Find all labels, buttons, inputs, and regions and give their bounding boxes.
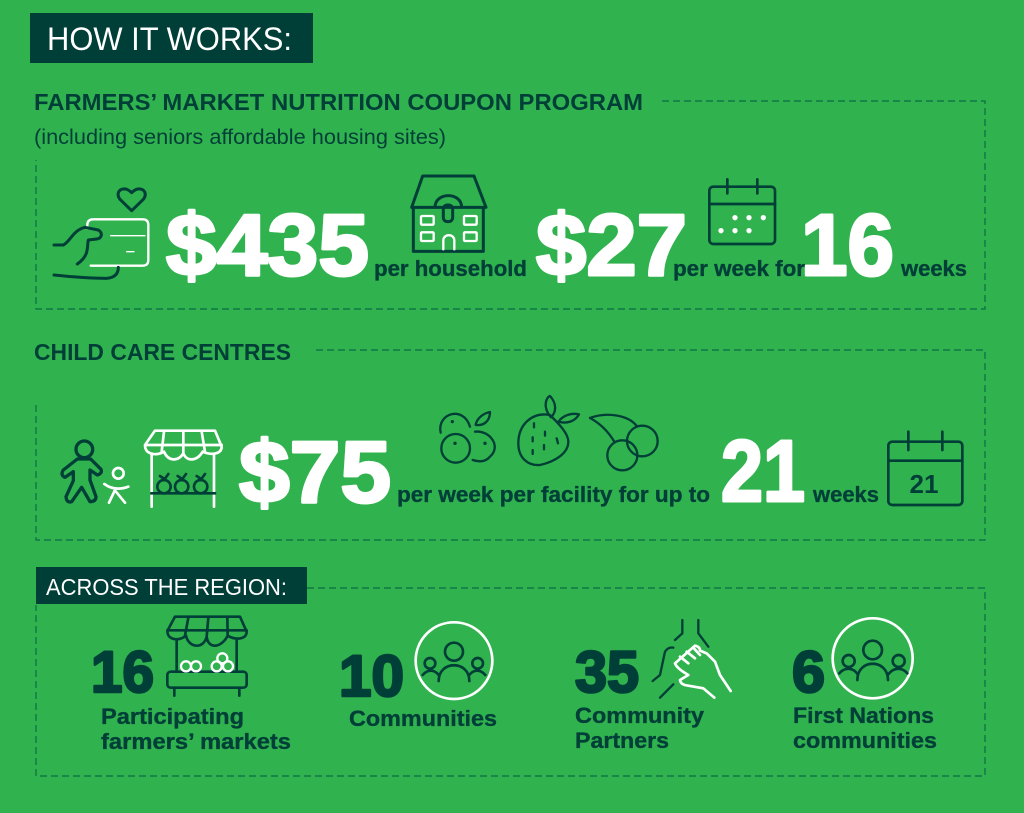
number: 21 weeks: 21 — [721, 423, 805, 520]
icon: house — [412, 176, 486, 251]
icon: joined hands — [653, 620, 731, 698]
label: per week per facility for up to: per week per facility for up to — [397, 482, 710, 507]
label: community partners: Partners — [575, 728, 669, 753]
icon: people in circle — [416, 622, 492, 699]
label: first nations communities: communities — [793, 728, 937, 753]
stat: 10 communities: 10 — [339, 644, 404, 709]
title: HOW IT WORKS: — [47, 21, 292, 57]
icon: calendar 21 — [888, 432, 962, 505]
label: weeks: weeks — [812, 482, 879, 507]
panel: farmers' market nutrition coupon program — [34, 89, 985, 309]
heading: coupon program: FARMERS’ MARKET NUTRITION COUPON PROGRAM — [34, 89, 643, 115]
icon: hand holding card with heart — [54, 189, 148, 278]
label: per household: per household — [374, 256, 527, 281]
amount: $75: $75 — [239, 424, 391, 521]
panel: child care centres — [34, 339, 985, 540]
label: community partners — [575, 703, 705, 753]
stat: 6 first nations communities — [792, 618, 937, 753]
icon: market stall with apples — [145, 431, 222, 507]
label: per week for: per week for — [673, 256, 805, 281]
number: 16 weeks: 16 — [801, 197, 894, 294]
icon: calendar with dots — [709, 179, 775, 244]
title — [30, 13, 313, 63]
icon: cherries — [590, 415, 658, 470]
label: community partners: Community — [575, 703, 705, 728]
subheading: seniors housing: (including seniors affordable housing sites) — [34, 126, 446, 149]
panel: across the region — [36, 567, 985, 776]
stat: 35 community partners: 35 — [575, 640, 639, 705]
label: communities: Communities — [349, 706, 497, 731]
amount: $435: $435 — [166, 197, 369, 294]
label: first nations communities — [793, 703, 937, 753]
icon: people in circle — [833, 618, 913, 698]
icon: berries — [440, 412, 495, 463]
stat: 10 communities — [339, 622, 497, 731]
heading: child care centres: CHILD CARE CENTRES — [34, 339, 291, 365]
heading: across the region — [36, 567, 307, 604]
stat: 16 farmers' markets — [91, 617, 291, 754]
icon: strawberry — [518, 396, 579, 465]
amount: $27: $27 — [536, 197, 687, 294]
label: participating farmers' markets: farmers’ markets — [101, 729, 291, 754]
stat: 6 first nations communities: 6 — [792, 640, 825, 705]
heading: across the region: ACROSS THE REGION: — [46, 574, 287, 600]
label: participating farmers' markets: Participating — [101, 704, 244, 729]
label: first nations communities: First Nations — [793, 703, 934, 728]
icon: market stall — [167, 617, 247, 696]
label: participating farmers' markets — [101, 704, 291, 754]
icon: adult and child — [62, 441, 128, 503]
label: weeks: weeks — [900, 256, 967, 281]
icon: calendar 21: 21 — [910, 469, 938, 499]
stat: 35 community partners — [575, 620, 731, 753]
stat: 16 farmers' markets: 16 — [91, 640, 154, 705]
